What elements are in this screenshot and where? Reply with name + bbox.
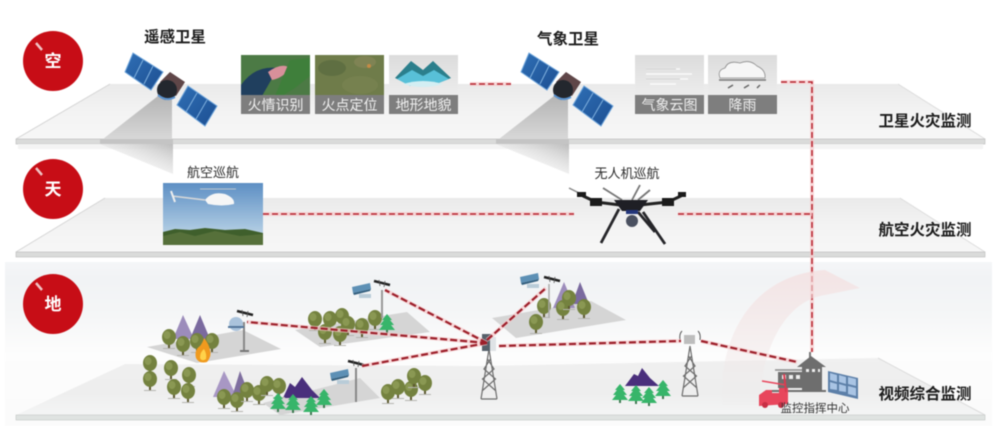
badge: 空: 空 [44,51,62,71]
camera pole: mountain zone [520,273,560,318]
badge: 空 [23,31,83,91]
trees: lower left grove [143,355,196,402]
beam: weather satellite footprint [496,96,569,174]
camera pole: forest zone [352,280,390,318]
tile: fire location [315,55,384,114]
badge: 地: 地 [44,295,62,314]
label: video integrated monitoring: 视频综合监测 [878,384,972,403]
links: wireless camera links [247,288,797,366]
panel: satellite monitoring platform [16,84,985,149]
tile: rainfall: 降雨 [728,97,756,113]
caption: aerial patrol: 航空巡航 [187,165,239,180]
panel: aviation monitoring platform [16,198,985,257]
tile: fire location: 火点定位 [322,97,378,113]
tile: weather cloud map: 气象云图 [642,97,698,113]
link: terrain tile to weather satellite [470,82,511,86]
trees: lower centre grove [217,376,286,412]
camera pole: dome camera [228,310,253,352]
icon: fire truck [759,374,788,408]
trees: forest zone [308,308,382,346]
background: ground fog band [5,262,992,426]
mountains: dark purple lower [283,377,320,398]
tile: fire identification [241,55,310,114]
plate: lower forest zone [263,378,380,415]
trees: right grove [381,368,432,404]
relay tower: main [481,334,497,399]
badge: 地 [23,274,83,334]
caption: drone patrol: 无人机巡航 [594,166,660,181]
icon: video wall [828,371,858,399]
trees: fire zone [162,329,219,356]
photo: helicopter patrol [163,183,263,245]
camera pole: lower forest zone [330,360,364,402]
tile: terrain: 地形地貌 [396,97,452,113]
plate: fire zone [147,330,281,363]
icon: command center building [770,352,826,391]
heading: weather satellite: 气象卫星 [537,29,599,48]
mountains: fire zone [173,315,210,339]
relay tower: secondary [680,331,700,396]
icon: drone [569,185,686,244]
trees: green conifers [270,314,671,415]
icon: fire [196,338,211,362]
link: drone to vertical trunk [678,212,812,216]
tile: fire identification: 火情识别 [248,97,304,113]
beam: remote sensing satellite footprint [100,96,173,174]
tile: rainfall [708,55,777,114]
panel: ground monitoring platform [16,358,985,420]
caption: command center: 监控指挥中心 [780,401,850,415]
icon: remote sensing satellite [125,53,217,126]
mountains: mountain zone [553,282,589,308]
heading: remote sensing satellite: 遥感卫星 [144,27,206,46]
decoration arrow: pale signal arc [722,270,860,405]
badge: 天 [23,159,83,219]
link: rainfall tile to command center [781,82,812,352]
tile: weather cloud map [635,55,704,114]
link: aerial patrol to drone [263,212,574,216]
plate: mountain zone [492,301,626,338]
trees: mountain zone [529,290,591,334]
icon: weather satellite [521,53,613,126]
mountains: dark purple middle [625,368,659,386]
label: aviation fire monitoring: 航空火灾监测 [878,220,972,239]
badge: 天: 天 [44,180,62,199]
label: satellite fire monitoring: 卫星火灾监测 [878,111,972,130]
plate: forest zone [295,312,430,347]
tile: terrain [389,55,458,114]
mountains: lower left [213,371,250,397]
